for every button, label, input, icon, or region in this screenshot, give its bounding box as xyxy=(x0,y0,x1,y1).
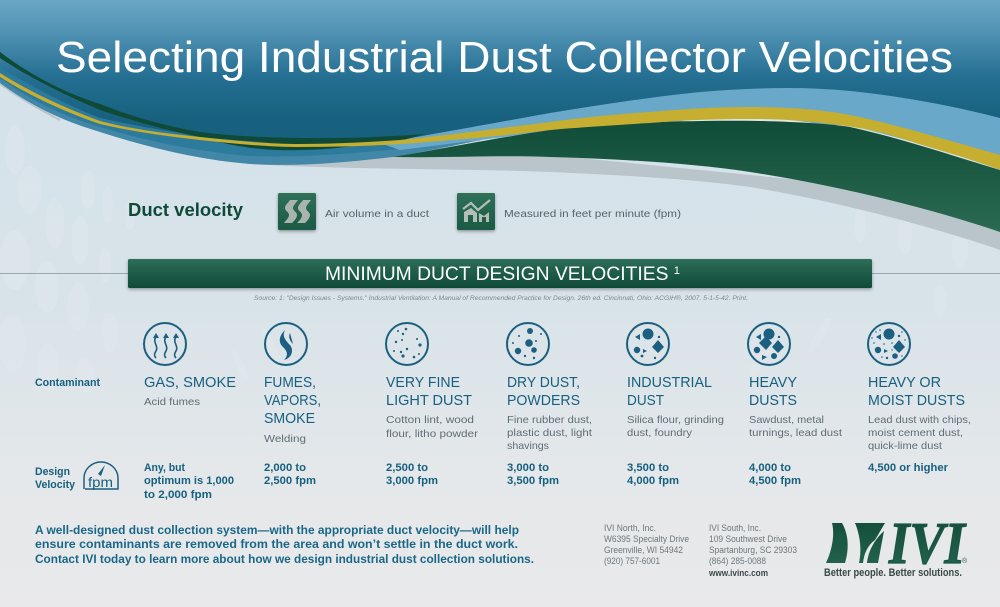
column: dry dust, powders: 3,500 fpm xyxy=(507,475,559,487)
header swoosh xyxy=(0,0,1000,250)
column: fumes: FUMES, xyxy=(264,374,316,391)
divider line xyxy=(0,273,1000,274)
registered mark: ® xyxy=(962,557,968,565)
column: heavy or moist dusts: 4,500 or higher xyxy=(868,462,949,474)
logo xyxy=(824,510,968,579)
banner: 1 xyxy=(674,265,680,277)
column: industrial dust: INDUSTRIAL xyxy=(627,374,712,391)
teal inner band xyxy=(0,60,420,157)
column: gas, smoke: optimum is 1,000 xyxy=(144,475,234,487)
column: fumes: 2,500 fpm xyxy=(264,475,316,487)
column: industrial dust: 3,500 to xyxy=(627,462,669,474)
icon: fumes xyxy=(265,323,307,365)
green ribbon xyxy=(393,121,1000,232)
icon: very fine dust xyxy=(386,323,428,365)
blue header field xyxy=(0,0,1000,145)
column: gas, smoke: Any, but xyxy=(144,462,185,474)
column: heavy dusts: 4,000 to xyxy=(749,462,791,474)
column: heavy dusts: turnings, lead dust xyxy=(749,427,842,439)
column: gas, smoke: Acid fumes xyxy=(144,396,200,408)
light blue ribbon xyxy=(380,88,1000,165)
closing paragraph xyxy=(35,523,534,566)
address: IVI South: (864) 285-0088 xyxy=(709,556,766,567)
column: dry dust, powders: POWDERS xyxy=(507,392,580,409)
closing paragraph: Contact IVI today to learn more about how we design industrial dust collection solutions. xyxy=(35,552,534,566)
column: heavy dusts: HEAVY xyxy=(749,374,797,391)
heading: duct velocity: Duct velocity xyxy=(128,200,243,220)
gold ribbon xyxy=(0,73,1000,170)
icon: moist dusts xyxy=(868,323,910,365)
column: very fine light dust: LIGHT DUST xyxy=(386,392,472,409)
column: heavy or moist dusts: quick-lime dust xyxy=(868,440,942,452)
row label: design velocity: Velocity xyxy=(35,479,76,491)
column: heavy dusts: DUSTS xyxy=(749,392,797,409)
row label: contaminant: Contaminant xyxy=(35,377,100,389)
row label: design velocity: Design xyxy=(35,466,70,478)
banner xyxy=(128,259,872,288)
grey edge at left xyxy=(0,84,60,120)
column: industrial dust: Silica flour, grinding xyxy=(627,414,724,426)
address: IVI North xyxy=(604,523,689,567)
address: IVI South: IVI South, Inc. xyxy=(709,523,761,534)
text: air volume: Air volume in a duct xyxy=(325,208,429,220)
column: very fine light dust: Cotton lint, wood xyxy=(386,414,474,426)
row label: design velocity xyxy=(35,462,118,491)
column: dry dust, powders xyxy=(507,323,592,487)
grey shadow ribbon xyxy=(250,150,1000,250)
address: IVI North: W6395 Specialty Drive xyxy=(604,534,689,545)
address: IVI North: Greenville, WI 54942 xyxy=(604,545,683,556)
column: dry dust, powders: Fine rubber dust, xyxy=(507,414,592,426)
column: heavy or moist dusts: MOIST DUSTS xyxy=(868,392,965,409)
banner: MINIMUM DUCT DESIGN VELOCITIES xyxy=(325,264,664,285)
column: heavy dusts: 4,500 fpm xyxy=(749,475,801,487)
column: heavy dusts: Sawdust, metal xyxy=(749,414,824,426)
column: dry dust, powders: 3,000 to xyxy=(507,462,549,474)
icon: measured chart xyxy=(457,193,495,230)
pale sliver above green xyxy=(680,118,830,127)
column: very fine light dust: 2,500 to xyxy=(386,462,428,474)
address: IVI North: (920) 757-6001 xyxy=(604,556,660,567)
address: IVI South xyxy=(708,523,797,579)
column: gas, smoke xyxy=(144,323,236,501)
column: very fine light dust: flour, litho powder xyxy=(386,428,479,440)
column: fumes xyxy=(264,323,321,487)
icon: gas xyxy=(144,323,186,365)
column: gas, smoke: to 2,000 fpm xyxy=(144,489,212,501)
logo letters: IVI xyxy=(888,510,967,576)
closing paragraph: ensure contaminants are removed from the area and won’t settle in the duct work. xyxy=(35,537,518,551)
column: very fine light dust: VERY FINE xyxy=(386,374,460,391)
column: dry dust, powders: shavings xyxy=(507,440,549,452)
column: fumes: 2,000 to xyxy=(264,462,306,474)
column: gas, smoke: GAS, SMOKE xyxy=(144,374,236,391)
icon: dry dust xyxy=(507,323,549,365)
logo mark xyxy=(826,523,885,563)
title: Selecting Industrial Dust Collector Velocities xyxy=(56,33,953,82)
column: very fine light dust: 3,000 fpm xyxy=(386,475,438,487)
duct velocity row xyxy=(128,193,681,230)
address: IVI South: www.ivinc.com xyxy=(708,568,768,579)
dark green lens under gold xyxy=(215,141,360,150)
column: industrial dust xyxy=(627,323,724,487)
column: industrial dust: 4,000 fpm xyxy=(627,475,679,487)
icon: industrial dust xyxy=(627,323,669,365)
column: fumes: Welding xyxy=(264,433,306,445)
column: heavy or moist dusts xyxy=(868,323,971,474)
text: measured: Measured in feet per minute (fpm) xyxy=(504,208,681,220)
column: fumes: VAPORS, xyxy=(264,392,321,409)
icon: heavy dusts xyxy=(748,323,790,365)
column: dry dust, powders: DRY DUST, xyxy=(507,374,580,391)
closing paragraph: A well-designed dust collection system—with the appropriate duct velocity—will help xyxy=(35,523,519,537)
source note: Source: 1: "Design Issues - Systems." Industrial Ventilation: A Manual of Recommended Practice for Design. 26th ed. Cincinnati, Ohio: ACGIH®, 2007. 5-1-5-42. Print. xyxy=(254,295,748,302)
column: heavy or moist dusts: moist cement dust, xyxy=(868,427,963,439)
tagline: Better people. Better solutions. xyxy=(824,567,962,579)
address: IVI South: Spartanburg, SC 29303 xyxy=(709,545,797,556)
icon: fpm gauge: fpm xyxy=(88,474,113,490)
dark green line xyxy=(0,52,425,144)
column: fumes: SMOKE xyxy=(264,410,315,427)
icon: air volume xyxy=(278,193,316,230)
column: industrial dust: DUST xyxy=(627,392,664,409)
address: IVI North: IVI North, Inc. xyxy=(604,523,656,534)
column: very fine light dust xyxy=(386,323,479,487)
teal lower ribbon xyxy=(0,60,530,165)
address: IVI South: 109 Southwest Drive xyxy=(709,534,787,545)
column: heavy or moist dusts: Lead dust with chips, xyxy=(868,414,971,426)
column: heavy or moist dusts: HEAVY OR xyxy=(868,374,941,391)
column: dry dust, powders: plastic dust, light xyxy=(507,427,592,439)
column: heavy dusts xyxy=(748,323,842,487)
background dot pattern xyxy=(0,126,968,393)
column: industrial dust: dust, foundry xyxy=(627,427,693,439)
